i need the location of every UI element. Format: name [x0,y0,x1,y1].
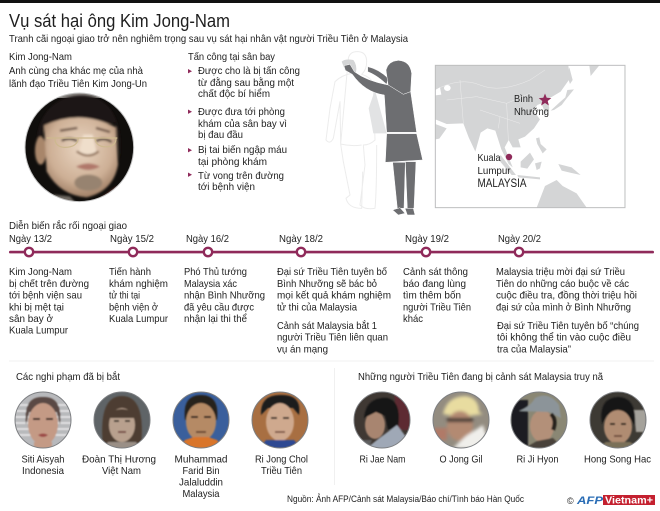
logo: AFP Vietnam+: Vietnam+ [605,496,653,506]
timeline text: 19/2: tìm thêm bốn [403,290,461,302]
timeline text: 19/2 [403,266,471,325]
timeline text: 13/2 [9,266,89,337]
title: Vụ sát hại ông Kim Jong-Nam [9,11,230,31]
timeline text: 20/2: cuộc điều tra, đồng thời triệu hồi [496,290,637,302]
name: Doan Thi Huong: Việt Nam [102,465,141,477]
name: Ri Jong Chol [255,454,308,477]
timeline text: 19/2: báo đang lùng [403,278,466,290]
map: Asia [435,65,625,208]
bullet list: từ đằng sau bằng một [198,76,294,89]
bullet list [188,65,300,193]
timeline text: 16/2: nhận Bình Nhưỡng [184,290,265,302]
name: Siti Aisyah [22,454,65,477]
name: Ri Jae Nam: Ri Jae Nam [360,454,406,466]
timeline text: 20/2: Malaysia triệu mời đại sứ Triều [496,266,625,278]
heading: timeline: Diễn biến rắc rối ngoại giao [9,219,127,232]
timeline text: 13/2: Kim Jong-Nam [9,266,72,278]
land [435,65,610,208]
timeline text: 20/2: tra của Malaysia” [497,343,571,355]
timeline text: 20/2 [496,266,639,355]
portrait: Ri Ji Hyon [511,392,567,450]
timeline text: 20/2: Tiên do những cáo buộc về các [496,278,629,290]
portrait: O Jong Gil [433,392,491,450]
timeline text: 15/2: Tiến hành [109,266,151,278]
bullet list: tại phòng khám [198,156,267,168]
timeline [9,233,654,256]
timeline text: 13/2: khi bị mệt tại [9,301,64,313]
date labels: Ngày 13/2 [9,233,52,245]
timeline text: 16/2: Phó Thủ tướng [184,266,247,278]
timeline text: 16/2: đã yêu cầu được [184,301,254,313]
text: description: Anh cùng cha khác mẹ của nhà [9,65,143,77]
timeline text: 15/2 [109,266,168,325]
bullet list: Bị tai biến ngập máu [198,144,287,156]
timeline text: 13/2: Kuala Lumpur [9,325,68,337]
logo: AFP Vietnam+: © [567,496,574,506]
bullet list: chất độc bí hiểm [198,88,270,100]
date labels: Ngày 18/2 [279,233,323,245]
portrait: Kim Jong-Nam [24,92,134,202]
name: Ri Ji Hyon: Ri Ji Hyon [516,454,559,466]
timeline text: 18/2 [277,266,391,355]
map marker: Pyongyang star [539,94,551,106]
name: Muhammad Farid [174,454,228,500]
name: Muhammad Farid: Jalaluddin [179,476,223,488]
timeline text: 15/2: bệnh viện ở [109,301,158,313]
timeline text: 18/2: Bình Nhưỡng sẽ bác bỏ [277,278,377,290]
figure: victim [326,52,377,209]
bullet list: tới bệnh viện [198,181,255,193]
bullet list: Từ vong trên đường [198,170,284,182]
logo: AFP Vietnam+ [567,495,655,507]
logo: AFP Vietnam+: AFP [576,495,604,507]
portrait: Doan Thi Huong [94,392,150,450]
figure: attacker [344,60,423,215]
map marker: Kuala Lumpur dot [506,154,512,160]
heading: wanted: Những người Triều Tiên đang bị cảnh sát Malaysia truy nã [358,371,603,383]
map label: Kuala Lumpur: Kuala [478,152,501,164]
timeline text: 19/2: người Triều Tiên [403,301,471,313]
bullet list: bị đau đầu [198,129,243,141]
heading: Kim Jong-Nam: Kim Jong-Nam [9,51,72,63]
bullet list: khám của sân bay vì [198,118,287,130]
panel: arrested suspects [15,370,308,500]
name: Doan Thi Huong [82,454,156,477]
name: Muhammad Farid: Farid Bin [182,465,220,477]
map label: Bình Nhưỡng [514,93,549,118]
timeline text: 20/2: tôi không thể tin vào cuộc điều [497,332,631,344]
name: O Jong Gil: O Jong Gil [440,454,482,466]
illustration: attack silhouettes [326,52,423,215]
timeline text: 18/2: Đại sứ Triều Tiên tuyên bố [277,266,387,278]
timeline text: 18/2: Cảnh sát Malaysia bắt 1 [277,319,377,332]
text: description [9,65,147,90]
timeline text: 13/2: bị chết trên đường [9,278,89,290]
map label: Kuala Lumpur [478,152,511,177]
timeline text: 19/2: Cảnh sát thông [403,266,468,278]
portrait: Ri Jae Nam [354,392,410,452]
source note: Nguồn: Ảnh AFP/Cảnh sát Malaysia/Báo chí/Tình báo Hàn Quốc [287,493,524,505]
date labels: Ngày 15/2 [110,233,154,245]
timeline text: 20/2: đại sứ của mình ở Bình Nhưỡng [496,301,631,313]
timeline text: 13/2: tới bệnh viện sau [9,290,82,302]
timeline text: 20/2: Đại sứ Triều Tiên tuyên bố “chúng [497,320,639,332]
name: Ri Jong Chol: Ri Jong Chol [255,454,308,466]
timeline text: 18/2: người Triều Tiên liên quan [277,332,388,344]
timeline text: 18/2: tử thi của Malaysia [277,301,357,313]
panel: airport attack [188,51,300,193]
timeline text: 19/2: khác [403,313,423,325]
name: Muhammad Farid: Muhammad [174,454,228,466]
name: Siti Aisyah: Indonesia [22,465,64,477]
heading: attack: Tấn công tại sân bay [188,51,276,63]
heading: suspects: Các nghi phạm đã bị bắt [16,370,120,383]
name: Muhammad Farid: Malaysia [182,488,220,500]
map label: Kuala Lumpur: Lumpur [478,165,511,177]
timeline text: 16/2: Malaysia xác [184,278,237,290]
name: Hong Song Hac: Hong Song Hac [584,454,651,466]
panel: wanted North Koreans [354,371,651,466]
date labels [9,233,541,245]
timeline text: 15/2: Kuala Lumpur [109,313,168,325]
timeline text: 18/2: mọi kết quả khám nghiệm [277,290,391,302]
portrait: Ri Jong Chol [252,392,308,450]
subtitle: Tranh cãi ngoại giao trở nên nghiêm trọng sau vụ sát hại nhân vật người Triều Tiên ở Malaysia [9,33,408,45]
portrait: Hong Song Hac [590,392,646,450]
timeline text: 13/2: sân bay ở [9,313,53,325]
map label: Bình Nhưỡng: Bình [514,93,533,105]
panel: Kim Jong-Nam [9,51,147,208]
date labels: Ngày 20/2 [498,233,541,245]
portrait: Siti Aisyah [15,392,71,450]
name: Ri Jong Chol: Triều Tiên [261,465,302,477]
bullet list: Được đưa tới phòng [198,106,285,118]
timeline text: 16/2: nhận lại thi thể [184,313,247,325]
text: description: lãnh đạo Triều Tiên Kim Jong-Un [9,78,147,90]
date labels: Ngày 19/2 [405,233,449,245]
timeline text: 15/2: tử thi tại [109,290,140,302]
date labels: Ngày 16/2 [186,233,229,245]
name: Siti Aisyah: Siti Aisyah [22,454,65,466]
timeline text: 18/2: vụ án mạng [277,343,328,355]
timeline text: 15/2: khám nghiệm [109,278,168,290]
map label: Bình Nhưỡng: Nhưỡng [514,106,549,118]
bullet list: Được cho là bị tấn công [198,65,300,77]
name: Doan Thi Huong: Đoàn Thị Hương [82,454,156,466]
portrait: Muhammad Farid [173,392,229,450]
timeline text: 16/2 [184,266,265,325]
map label: Malaysia: MALAYSIA [478,178,527,190]
